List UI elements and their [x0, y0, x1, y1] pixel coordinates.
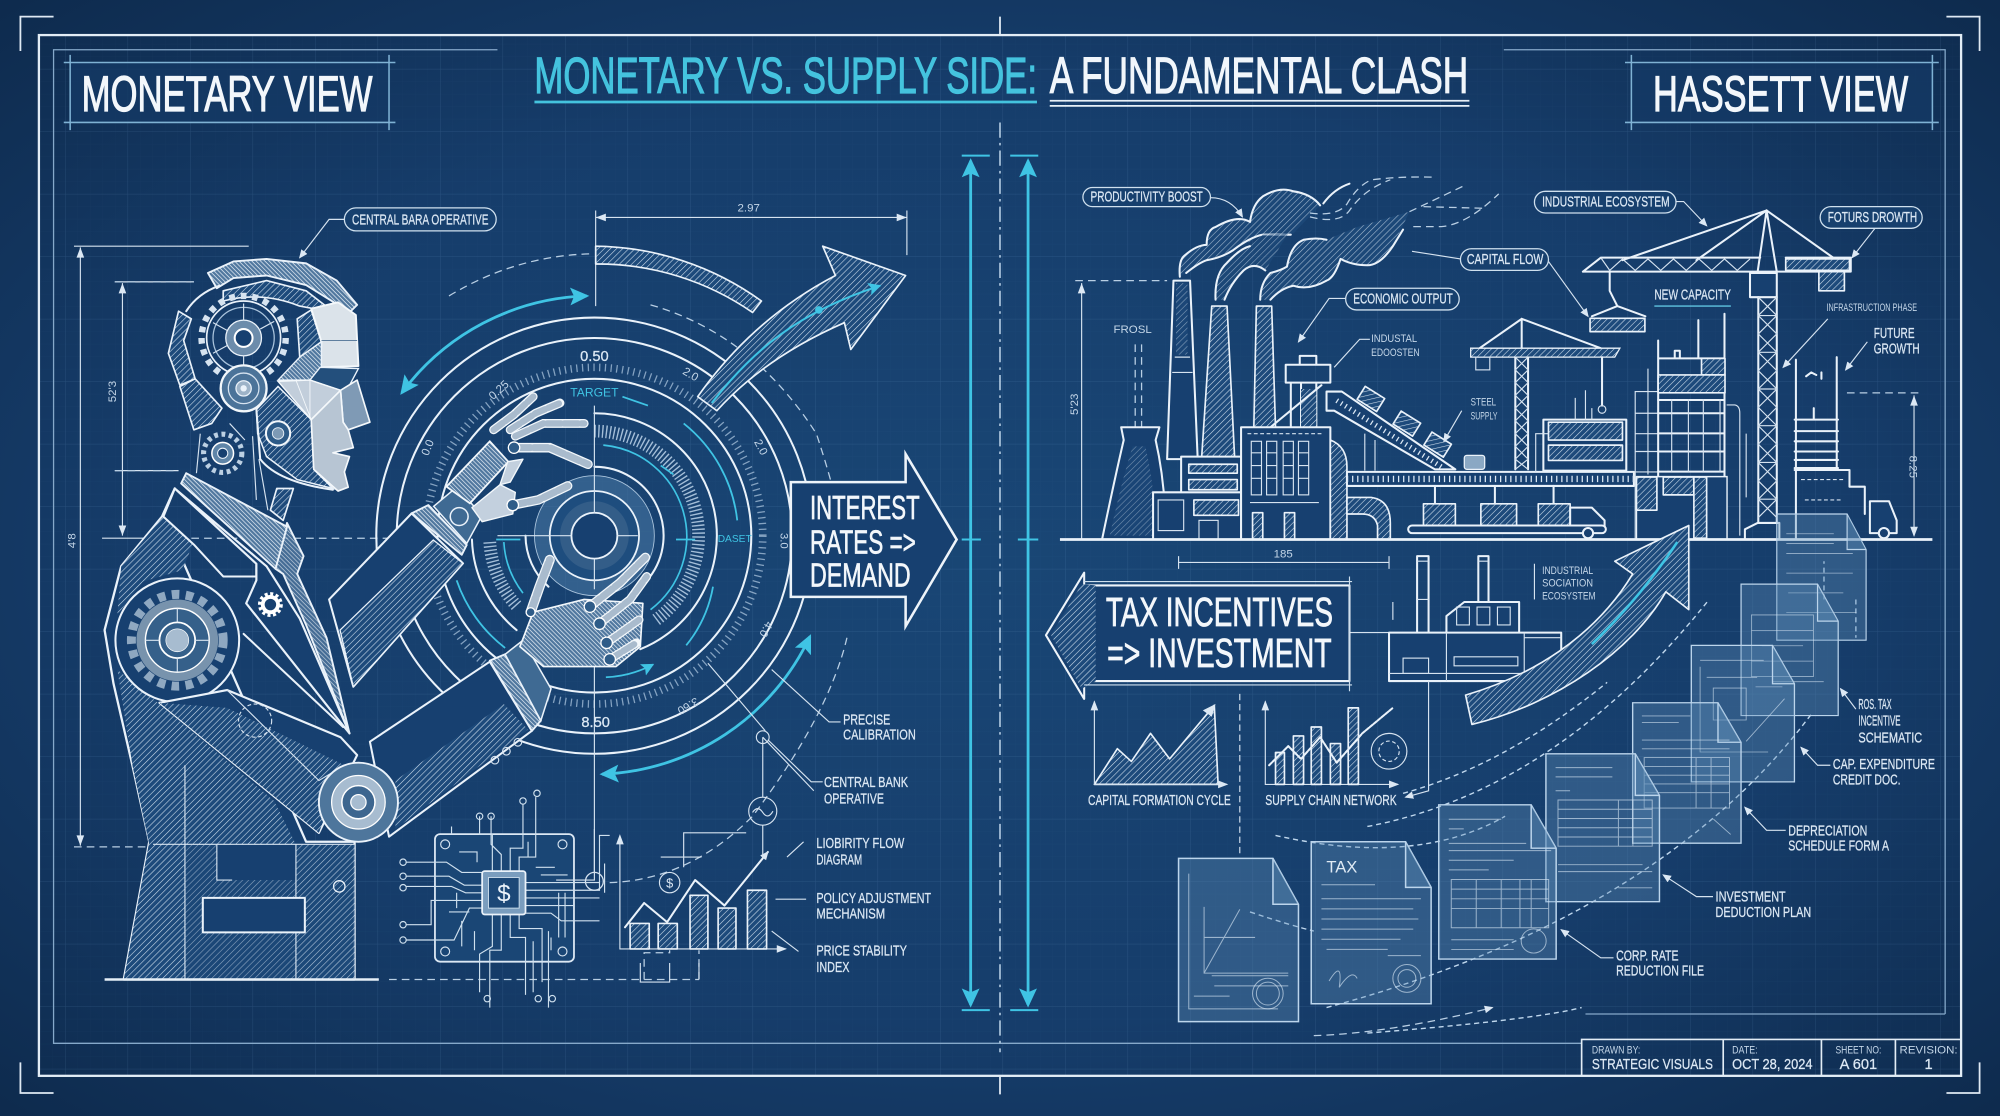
neck gear — [204, 421, 290, 472]
dimension lines left — [66, 246, 395, 847]
annotation: precise calibration: CALIBRATION — [843, 728, 916, 744]
label: industrial sociation: SOCIATION — [1542, 578, 1593, 590]
circuit board — [400, 790, 610, 1008]
annotation: tax incentive schematic: SCHEMATIC — [1858, 730, 1922, 746]
doc 6 — [1691, 645, 1794, 782]
rising arrow — [698, 246, 906, 411]
annotation: policy adjustment: MECHANISM — [816, 906, 885, 922]
chart: capital formation cycle — [1088, 694, 1240, 855]
annotation: precise calibration: PRECISE — [843, 712, 890, 728]
title: MONETARY VS. SUPPLY SIDE: — [534, 47, 1037, 104]
dial numbers: DASET — [718, 534, 752, 545]
torso — [105, 488, 699, 980]
skull plates — [168, 311, 195, 385]
title block: DRAWN BY: — [1592, 1045, 1640, 1057]
label: steel supply: SUPPLY — [1471, 411, 1498, 423]
jaw and neck — [196, 386, 333, 520]
doc 8 — [1777, 514, 1866, 640]
annotation: tax incentive schematic: INCENTIVE — [1858, 714, 1901, 730]
chart: supply chain network — [1261, 700, 1407, 809]
dimensions: 185 — [1274, 548, 1293, 560]
chimneys — [1167, 281, 1198, 459]
doc 1 — [1179, 858, 1298, 1022]
annotation: depreciation: SCHEDULE FORM A — [1788, 839, 1889, 855]
annotation: corporate rate: REDUCTION FILE — [1616, 964, 1704, 980]
annotation: depreciation: DEPRECIATION — [1788, 823, 1867, 839]
dimensions: FROSL — [1114, 324, 1152, 336]
label: industrial sociation: ECOSYSTEM — [1542, 590, 1596, 602]
label: new capacity: NEW CAPACITY — [1654, 288, 1731, 304]
doc 5 — [1633, 703, 1741, 843]
callout: tax incentives — [1046, 573, 1352, 699]
label: capital flow — [1412, 249, 1588, 316]
dial numbers: 3.0 — [778, 533, 790, 549]
title block: 1 — [1924, 1057, 1933, 1073]
central divider with double arrows — [962, 122, 1038, 1052]
heading: hassett view — [1625, 55, 1939, 130]
annotation: price stability: PRICE STABILITY — [816, 943, 907, 959]
dial — [376, 203, 907, 890]
heading: monetary view — [64, 55, 395, 130]
annotation: liquidity flow — [816, 836, 904, 869]
smoke — [1180, 177, 1499, 300]
annotation: tax incentive schematic: ROS. TAX — [1858, 697, 1892, 713]
hatched top arc — [596, 246, 761, 312]
label: industrial sociation — [1534, 564, 1596, 602]
face — [278, 302, 370, 491]
title block: OCT 28, 2024 — [1732, 1057, 1813, 1073]
annotation: central bank operative: CENTRAL BANK — [824, 775, 908, 791]
jacket emblem gear — [260, 594, 281, 615]
label: industal ecosystem small: INDUSTAL — [1371, 333, 1417, 345]
label: productivity boost: PRODUCTIVITY BOOST — [1091, 190, 1203, 206]
robotic hand upper — [446, 397, 588, 522]
annotation: policy adjustment: POLICY ADJUSTMENT — [816, 891, 931, 907]
doc 7 — [1741, 584, 1838, 716]
figure: central bank operative — [105, 259, 699, 980]
label: industal ecosystem small: EDOOSTEN — [1371, 347, 1420, 359]
callout: interest rates: RATES => — [810, 525, 916, 562]
dial numbers: 0.25 — [487, 379, 512, 403]
cyan arrows — [402, 296, 810, 774]
label: central bank operative pill: CENTRAL BARA OPERATIVE — [352, 212, 489, 228]
annotation: liquidity flow: LIOBIRITY FLOW — [816, 836, 904, 852]
panel: hassett view — [1046, 177, 1935, 1036]
annotation: investment deduction — [1663, 875, 1811, 921]
top dimension — [596, 203, 907, 306]
label: industrial ecosystem: INDUSTRIAL ECOSYSTEM — [1542, 195, 1670, 211]
title block: SHEET NO: — [1835, 1045, 1881, 1057]
title block — [1582, 1039, 1962, 1076]
annotation: investment deduction: DEDUCTION PLAN — [1716, 905, 1811, 921]
title block: STRATEGIC VISUALS — [1592, 1057, 1713, 1073]
dial numbers — [420, 349, 790, 731]
doc 4 — [1546, 754, 1659, 902]
head — [168, 259, 370, 520]
chart: supply chain network: SUPPLY CHAIN NETWORK — [1265, 793, 1397, 809]
arm upper back — [159, 487, 551, 842]
label: infrastruction phase — [1783, 302, 1917, 367]
factory — [1102, 281, 1390, 540]
annotation: price stability — [816, 943, 907, 976]
hair band — [208, 259, 357, 314]
cooling tower — [1102, 427, 1166, 540]
label: economic output: ECONOMIC OUTPUT — [1353, 292, 1453, 308]
label: future growth: GROWTH — [1874, 341, 1920, 357]
dimensions: 5'23 — [1069, 394, 1081, 415]
title block: DATE: — [1732, 1045, 1758, 1057]
dial numbers: 4.0 — [756, 619, 774, 639]
right tower — [1795, 357, 1897, 540]
shoulder gear — [115, 578, 239, 702]
annotation: price stability: INDEX — [816, 960, 850, 976]
ground line — [1060, 538, 1932, 541]
doc 3 — [1439, 805, 1556, 959]
circuit board: $ — [497, 881, 511, 908]
dial numbers: 3.60 — [675, 695, 700, 716]
annotation: investment deduction: INVESTMENT — [1716, 890, 1786, 906]
label: future growth — [1846, 326, 1920, 370]
label: industal ecosystem small — [1334, 333, 1420, 367]
dial numbers: TARGET — [570, 386, 619, 400]
tower top — [1286, 356, 1330, 434]
robotic hand lower — [520, 557, 647, 667]
hatched arrow — [1466, 525, 1689, 724]
ear disc — [221, 365, 267, 411]
annotation: depreciation — [1745, 807, 1889, 855]
building under construction — [1635, 314, 1746, 540]
callout: interest rates: INTEREST — [810, 490, 920, 527]
dial numbers: 0.0 — [420, 438, 437, 457]
callout: interest rates: DEMAND — [810, 558, 911, 595]
small crane — [1471, 319, 1620, 469]
title block: A 601 — [1840, 1057, 1877, 1073]
conveyor — [1327, 386, 1634, 538]
buildings — [1181, 457, 1241, 495]
lapels and shirt — [175, 473, 349, 733]
title block: REVISION: — [1900, 1045, 1958, 1057]
label: central bank operative pill — [300, 208, 496, 258]
dial numbers: 2.0 — [680, 366, 700, 384]
label: economic output — [1298, 288, 1459, 342]
label: infrastruction phase: INFRASTRUCTION PHASE — [1827, 302, 1917, 314]
panel: monetary view — [66, 203, 957, 1008]
label: steel supply: STEEL — [1471, 397, 1496, 409]
brain gear — [202, 296, 286, 380]
leaders and labels: monetary annotations — [768, 670, 931, 976]
annotation: capex credit: CAP. EXPENDITURE — [1833, 757, 1935, 773]
callout: tax incentives: => INVESTMENT — [1107, 630, 1332, 676]
bar chart: price stability — [616, 663, 814, 982]
label: new capacity — [1654, 288, 1731, 306]
annotation: capex credit: CREDIT DOC. — [1833, 772, 1901, 788]
annotation: capex credit — [1801, 747, 1935, 788]
callout: interest rates — [791, 454, 957, 626]
doc tax mark: TAX — [1326, 857, 1357, 876]
label: future growth pill — [1820, 207, 1922, 258]
label: future growth pill: FOTURS DROWTH — [1828, 210, 1917, 226]
title: A FUNDAMENTAL CLASH — [1050, 47, 1468, 104]
dimension lines left: 52'3 — [107, 381, 119, 402]
chart: capital formation cycle: CAPITAL FORMATION CYCLE — [1088, 793, 1231, 809]
dimension lines left: 4'8 — [66, 533, 78, 548]
top dimension: 2.97 — [738, 203, 760, 215]
label: industrial ecosystem — [1534, 191, 1707, 226]
bar chart: price stability: $ — [666, 876, 673, 891]
annotation: liquidity flow: DIAGRAM — [816, 853, 862, 869]
annotation: corporate rate — [1561, 930, 1704, 980]
big crane — [1583, 210, 1851, 540]
label: steel supply — [1444, 397, 1498, 441]
labels on factory — [1083, 187, 1922, 441]
documents stack — [1179, 514, 1866, 1033]
rings — [376, 318, 812, 754]
label: capital flow: CAPITAL FLOW — [1467, 252, 1543, 268]
small factory — [1349, 556, 1561, 681]
label: future growth: FUTURE — [1874, 326, 1915, 342]
annotations: documents — [1561, 689, 1935, 980]
dimensions: 8.25 — [1906, 456, 1918, 478]
heading: monetary view: MONETARY VIEW — [82, 66, 372, 122]
dial numbers: 2.0 — [751, 438, 769, 457]
process block — [1536, 390, 1626, 472]
callout: tax incentives: TAX INCENTIVES — [1106, 589, 1333, 635]
chart: rising arrow and small factory — [1349, 525, 1689, 797]
dial numbers: 0.50 — [580, 349, 609, 365]
doc 2 — [1311, 842, 1431, 1004]
annotation: central bank operative — [824, 775, 908, 808]
annotation: policy adjustment — [816, 891, 931, 922]
label: industrial sociation: INDUSTRIAL — [1542, 565, 1593, 577]
label: productivity boost — [1083, 187, 1242, 217]
dial numbers: 8.50 — [581, 715, 610, 731]
annotation: central bank operative: OPERATIVE — [824, 792, 884, 808]
annotation: corporate rate: CORP. RATE — [1616, 948, 1679, 964]
annotation: tax incentive schematic — [1841, 689, 1922, 746]
annotation: precise calibration — [843, 712, 916, 744]
dimensions — [1069, 281, 1921, 569]
